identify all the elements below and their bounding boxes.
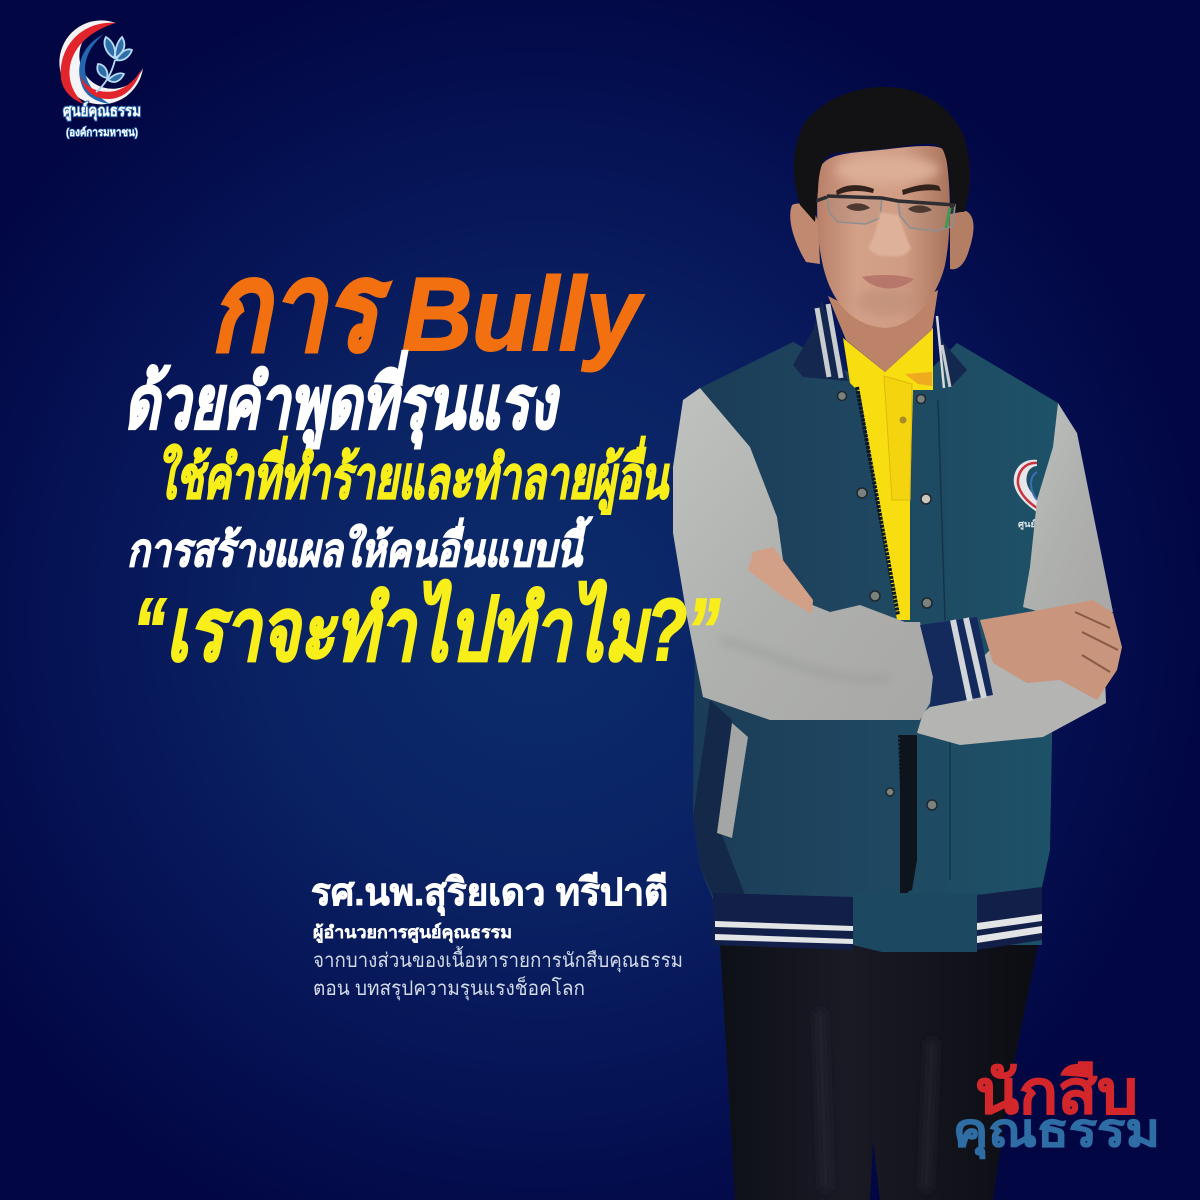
speaker role: ผู้อำนวยการศูนย์คุณธรรม (313, 922, 512, 944)
headline line: wounding others: การสร้างแผลให้คนอื่นแบบนี้ (127, 516, 593, 576)
centre gap (900, 735, 917, 895)
hand left (748, 547, 813, 614)
jacket chest badge: ศูนย์ (1018, 518, 1036, 530)
jacket dark side (693, 700, 745, 905)
jacket chest badge (1014, 460, 1037, 530)
source line 1: จากบางส่วนของเนื้อหารายการนักสืบคุณธรรม (313, 946, 683, 973)
eyes (846, 203, 932, 213)
word: Bully: Bully (402, 257, 645, 373)
yellow polo shirt (843, 328, 933, 620)
nose (868, 212, 911, 257)
word: การ: การ (210, 239, 391, 377)
headline: การ Bully (210, 239, 645, 377)
headline line: hurtful words: ใช้คำที่ทำร้ายและทำลายผู้อื่น (156, 436, 670, 515)
neck (828, 290, 938, 372)
headline line: violent words: ด้วยคำพูดที่รุนแรง (124, 350, 560, 449)
hand right (980, 600, 1122, 700)
hem band (713, 887, 1042, 952)
jacket collar right (934, 314, 967, 388)
right ear (950, 211, 974, 269)
forearm lower (917, 650, 1106, 745)
face (817, 146, 950, 328)
speaker name: รศ.นพ.สุริยเดว ทรีปาตี (311, 872, 668, 916)
source line 2: ตอน บทสรุปความรุนแรงช็อคโลก (313, 975, 585, 1001)
jacket pocket stripe (717, 723, 748, 838)
person: portrait with crossed arms (673, 87, 1122, 1200)
left ear (790, 204, 820, 264)
jacket placket seam (938, 400, 950, 880)
programme logo top word: นักสืบ (975, 1059, 1138, 1126)
programme logo bottom word: คุณธรรม (953, 1104, 1160, 1159)
programme logo (953, 1059, 1160, 1159)
mouth (862, 275, 914, 289)
jacket snaps (838, 392, 937, 938)
logo subtitle: (องค์การมหาชน) (66, 126, 138, 139)
jacket collar left (793, 300, 848, 381)
cuff (920, 617, 993, 707)
right sleeve upper (1023, 403, 1113, 612)
eyebrows (836, 184, 941, 195)
icon: crescent stripes (59, 20, 143, 104)
left sleeve (673, 388, 933, 720)
jacket body (693, 342, 1058, 945)
pants (720, 945, 1038, 1200)
icon: plant sprig (96, 37, 132, 92)
jacket zipper (857, 387, 906, 900)
headline line: question: “เราจะทำไปทำไม?” (133, 579, 720, 679)
logo name: ศูนย์คุณธรรม (63, 101, 141, 122)
logo: moral center (59, 20, 143, 139)
glasses (816, 196, 955, 231)
hair (794, 87, 970, 222)
